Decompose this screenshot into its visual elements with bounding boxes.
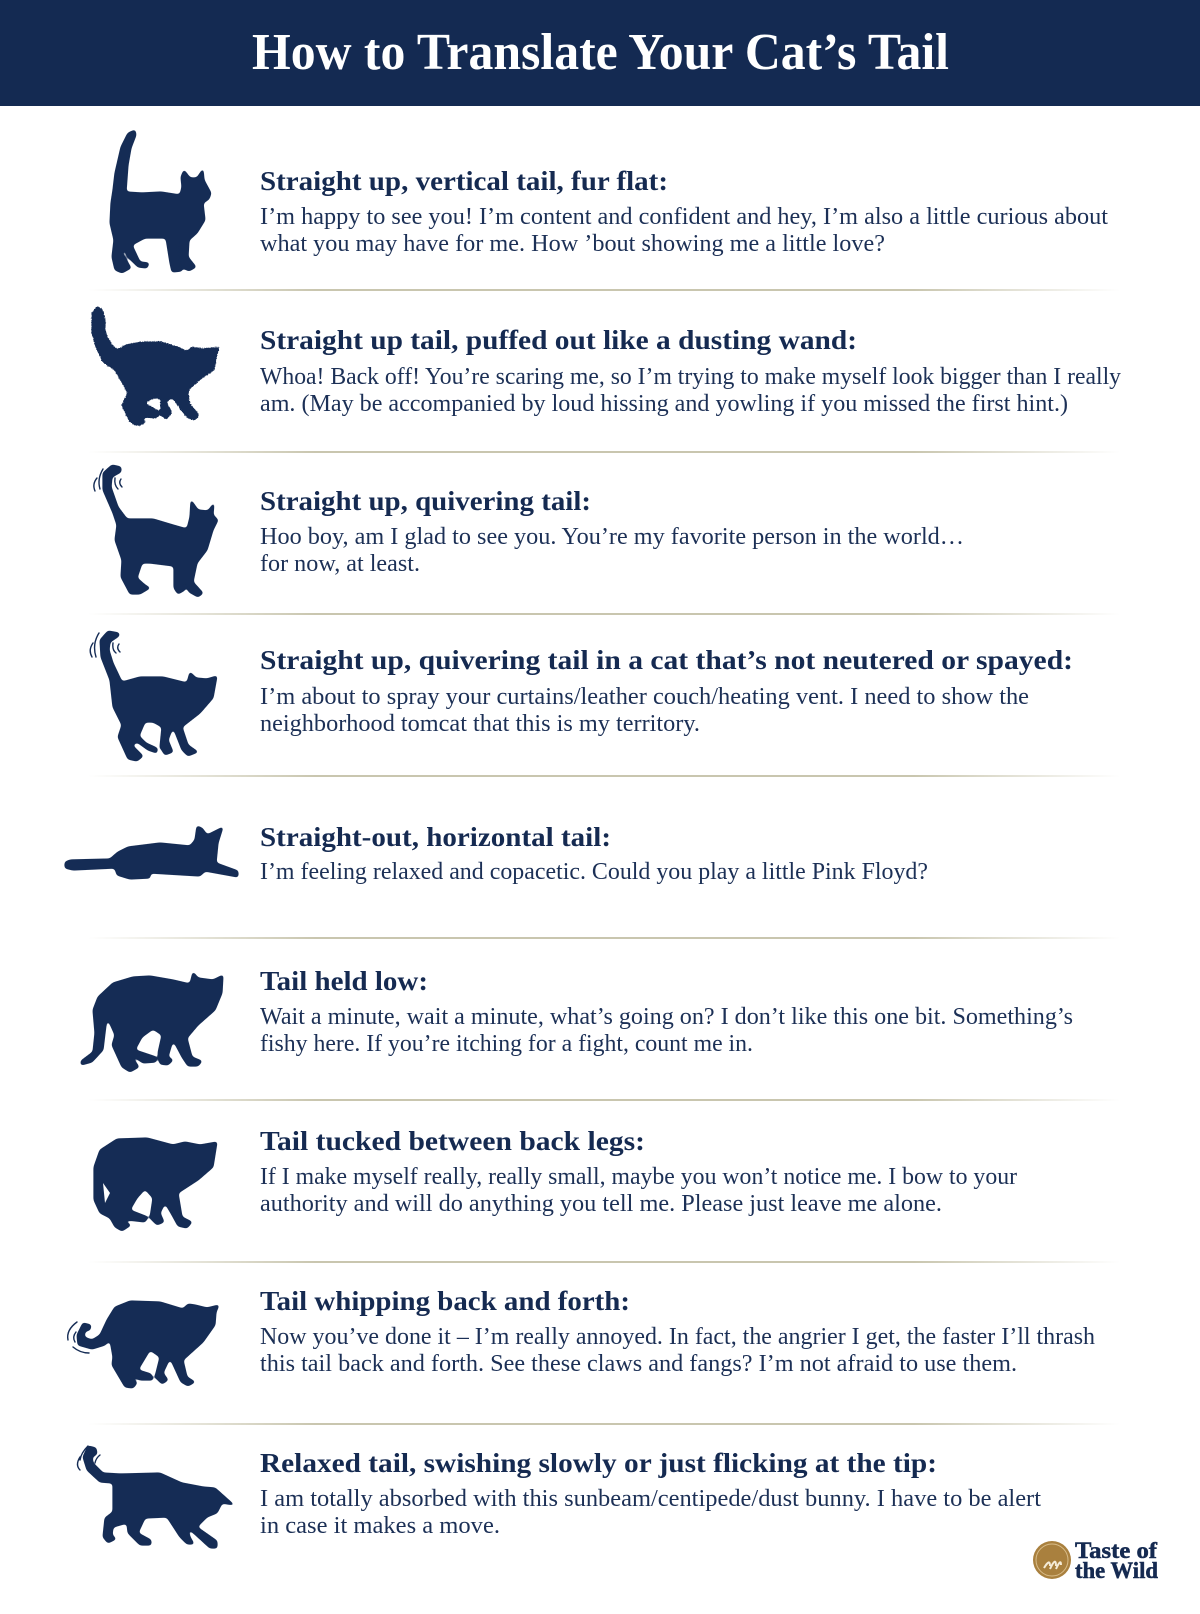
logo: Taste of the Wild: the Wild (1075, 1558, 1158, 1583)
heading: Tail tucked between back legs: (260, 1126, 645, 1156)
description: I’m feeling relaxed and copacetic. Could you play a little Pink Floyd? (260, 859, 928, 885)
icon: lying cat with horizontal tail (65, 826, 238, 879)
heading: Relaxed tail, swishing slowly or just flicking at the tip: (260, 1448, 937, 1478)
icon: cat with whipping tail (68, 1301, 219, 1388)
panel: quivering tail, not neutered or spayed: neighborhood tomcat that this is my territory. (260, 711, 700, 737)
panel: tail whipping: this tail back and forth. See these claws and fangs? I’m not afraid to use them. (260, 1351, 1017, 1377)
panel: relaxed tail: in case it makes a move. (260, 1513, 500, 1539)
panel: tail held low: fishy here. If you’re itching for a fight, count me in. (260, 1031, 753, 1057)
panel: horizontal tail (65, 822, 928, 885)
panel: quivering tail: for now, at least. (260, 551, 420, 577)
panel: tail whipping (68, 1286, 1095, 1388)
heading: Straight up, quivering tail: (260, 486, 591, 516)
panel: vertical tail, fur flat (110, 130, 1108, 273)
heading: Straight up, vertical tail, fur flat: (260, 166, 668, 196)
panel: relaxed tail (78, 1446, 1041, 1548)
title banner (0, 0, 1200, 106)
panel: quivering tail, not neutered or spayed (90, 631, 1073, 761)
icon: cat with quivering tail, rounded back (90, 631, 217, 761)
heading: Straight up, quivering tail in a cat that’s not neutered or spayed: (260, 645, 1073, 675)
description: I’m happy to see you! I’m content and confident and hey, I’m also a little curious about (260, 204, 1108, 230)
title: How to Translate Your Cat’s Tail (252, 24, 949, 81)
icon: gold medallion (1033, 1541, 1071, 1579)
description: I’m about to spray your curtains/leather couch/heating vent. I need to show the (260, 684, 1029, 710)
icon: cat with low tail (81, 972, 223, 1072)
description: I am totally absorbed with this sunbeam/centipede/dust bunny. I have to be alert (260, 1486, 1041, 1512)
heading: Straight up tail, puffed out like a dusting wand: (260, 325, 857, 355)
panel: tail held low (81, 966, 1073, 1072)
description: Whoa! Back off! You’re scaring me, so I’m trying to make myself look bigger than I really (260, 364, 1121, 390)
description: Hoo boy, am I glad to see you. You’re my favorite person in the world… (260, 524, 964, 550)
icon: cat with quivering tail (94, 465, 218, 597)
icon: cat with tucked tail (94, 1138, 217, 1231)
icon: arched cat with puffed tail (92, 306, 219, 426)
description: Wait a minute, wait a minute, what’s going on? I don’t like this one bit. Something’s (260, 1004, 1073, 1030)
panel: vertical tail, fur flat: what you may have for me. How ’bout showing me a little love? (260, 231, 885, 257)
logo: Taste of the Wild (1033, 1538, 1158, 1583)
panel: quivering tail (94, 465, 964, 597)
icon: prowling cat with swishing tail (78, 1446, 234, 1548)
description: If I make myself really, really small, maybe you won’t notice me. I bow to your (260, 1164, 1017, 1190)
panel: puffed tail: am. (May be accompanied by loud hissing and yowling if you missed the first hint.) (260, 391, 1068, 417)
heading: Tail whipping back and forth: (260, 1286, 630, 1316)
heading: Tail held low: (260, 966, 428, 996)
panel: tail tucked (94, 1126, 1017, 1231)
panel: puffed tail (92, 306, 1121, 426)
description: Now you’ve done it – I’m really annoyed. In fact, the angrier I get, the faster I’ll thrash (260, 1324, 1095, 1350)
panel: tail tucked: authority and will do anything you tell me. Please just leave me alone. (260, 1191, 942, 1217)
icon: cat with straight vertical tail (110, 130, 211, 273)
brand name: Taste of (1075, 1538, 1157, 1563)
heading: Straight-out, horizontal tail: (260, 822, 611, 852)
